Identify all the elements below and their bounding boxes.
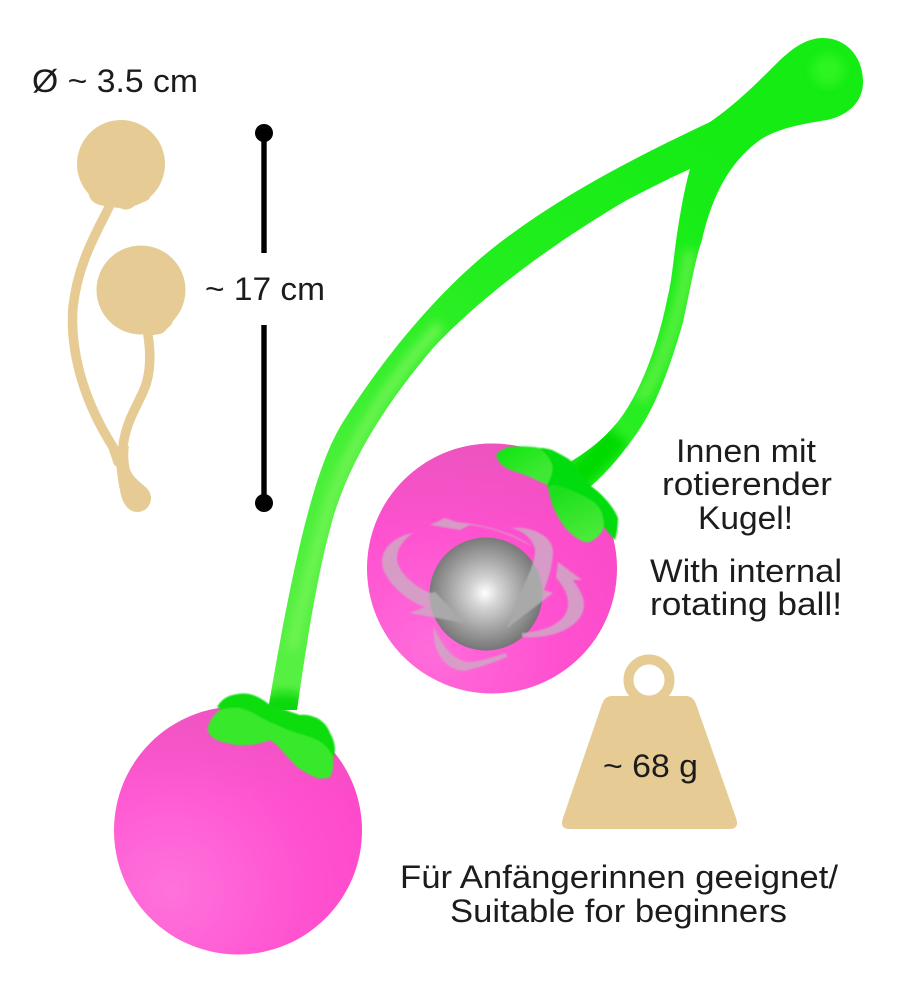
pink ball body [114, 706, 362, 954]
text block: internal rotating ball, German: Kugel! [698, 500, 793, 536]
text block: suitable for beginners: Für Anfängerinnen geeignet/ [400, 859, 838, 895]
icon: beige product silhouette [72, 120, 186, 512]
green calyx with stem base [496, 446, 618, 542]
inner metal sphere [430, 538, 542, 650]
pink ball body [367, 444, 617, 694]
icon: weight with label: ~ 68 g [603, 748, 698, 784]
plain pink ball [114, 694, 362, 954]
ball with internal rotating sphere [367, 444, 618, 694]
text block: internal rotating ball, English: rotating ball! [650, 586, 842, 622]
green calyx with stem base [208, 694, 335, 779]
rotation arrows [382, 518, 584, 671]
icon: weight with label [562, 660, 737, 829]
text block: suitable for beginners [400, 859, 838, 929]
text block: internal rotating ball, German [662, 433, 832, 536]
text block: internal rotating ball, German: rotierender [662, 466, 832, 502]
text block: internal rotating ball, English [650, 553, 842, 622]
dimension label: length: ~ 17 cm [205, 271, 325, 307]
text block: internal rotating ball, English: With internal [650, 553, 842, 589]
text block: suitable for beginners: Suitable for beginners [450, 893, 787, 929]
green stem [256, 38, 863, 724]
text block: internal rotating ball, German: Innen mit [676, 433, 816, 469]
dimension label: diameter: Ø ~ 3.5 cm [32, 63, 198, 99]
height dimension line [255, 124, 273, 512]
